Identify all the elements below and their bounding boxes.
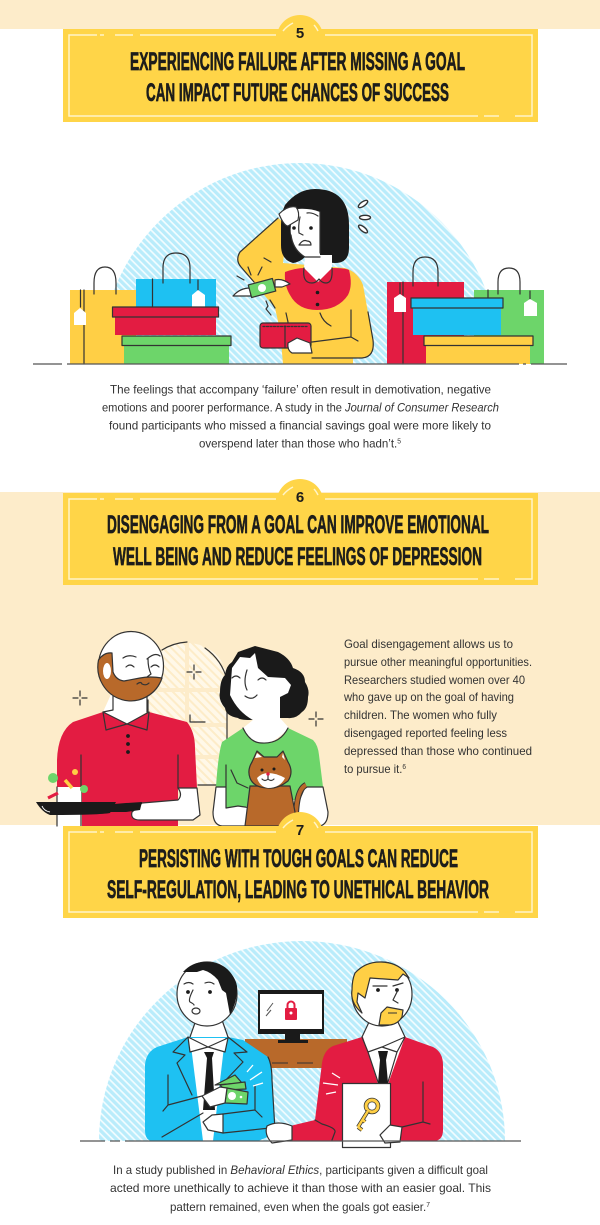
text block: section 6: who gave up on the goal of having xyxy=(343,690,514,704)
text block: section 6: children. The women who fully xyxy=(344,708,497,722)
text block: section 7: In a study published in Behavioral Ethics, participants given a difficult goal xyxy=(113,1163,488,1177)
gift box: yellow xyxy=(424,336,533,364)
icon: sparkles xyxy=(73,665,323,726)
heading banner: section 6 xyxy=(63,479,538,585)
text block: section 5 xyxy=(102,382,499,450)
text block: section 5: found participants who missed a financial savings goal were more likely to xyxy=(109,418,491,432)
ground line xyxy=(80,1140,521,1142)
shopping bag: red xyxy=(387,257,464,364)
shopping bag: blue xyxy=(136,253,216,308)
window xyxy=(147,642,227,785)
illustration: woman with shopping bags xyxy=(33,163,567,364)
text block: section 6: pursue other meaningful opportunities. xyxy=(344,655,532,669)
text block: section 6: Goal disengagement allows us to xyxy=(344,637,513,651)
desk xyxy=(245,1039,347,1068)
woman xyxy=(213,646,328,826)
frying pan with vegetables xyxy=(36,769,142,815)
illustration: two businessmen xyxy=(80,941,521,1148)
man: red suit xyxy=(266,962,443,1143)
icon: cat xyxy=(245,751,306,826)
ground line xyxy=(33,363,567,365)
striped semicircle xyxy=(100,163,500,364)
text block: section 5: The feelings that accompany ‘failure’ often result in demotivation, negative xyxy=(110,382,491,396)
woman xyxy=(238,189,373,364)
text block: section 7: pattern remained, even when the goals got easier. xyxy=(170,1200,436,1214)
heading banner: section 7 xyxy=(63,812,538,918)
man xyxy=(57,632,200,826)
text block: section 7: 7 xyxy=(426,1202,430,1209)
text block: section 6 xyxy=(343,637,532,776)
gift box: blue xyxy=(411,298,503,335)
text block: section 7 xyxy=(110,1163,491,1214)
text block: section 7: acted more unethically to achieve it than those with an easier goal. This xyxy=(110,1181,491,1195)
monitor with lock xyxy=(258,990,324,1043)
heading banner: section 5 xyxy=(63,15,538,122)
text block: section 5: 5 xyxy=(397,438,401,446)
text block: section 6: disengaged reported feeling less xyxy=(344,726,507,740)
shopping bag: green xyxy=(474,268,544,364)
man: blue suit xyxy=(145,962,275,1141)
heading banner: section 5: 5 xyxy=(296,25,304,42)
heading banner: section 7: 7 xyxy=(296,822,304,839)
background band: top xyxy=(0,0,600,29)
gift box: green xyxy=(122,336,231,364)
text block: section 5: emotions and poorer performance. A study in the Journal of Consumer Research xyxy=(102,400,499,414)
wallet xyxy=(260,323,312,353)
document with key xyxy=(342,1084,402,1148)
gift box: red xyxy=(112,307,218,335)
text block: section 6: to pursue it. xyxy=(344,762,407,776)
text block: section 6: 6 xyxy=(402,764,406,771)
icon: sweat drops xyxy=(357,199,370,234)
striped semicircle xyxy=(99,941,505,1141)
shopping bag: yellow xyxy=(70,267,136,364)
text block: section 5: overspend later than those who hadn’t. xyxy=(199,436,406,450)
heading banner: section 6: 6 xyxy=(296,489,304,506)
illustration: couple cooking with cat xyxy=(36,632,328,826)
background band: section 6 xyxy=(0,492,600,825)
icon: flying money xyxy=(233,267,290,315)
text block: section 6: depressed than those who continued xyxy=(344,744,532,758)
text block: section 6: Researchers studied women over 40 xyxy=(344,673,525,687)
